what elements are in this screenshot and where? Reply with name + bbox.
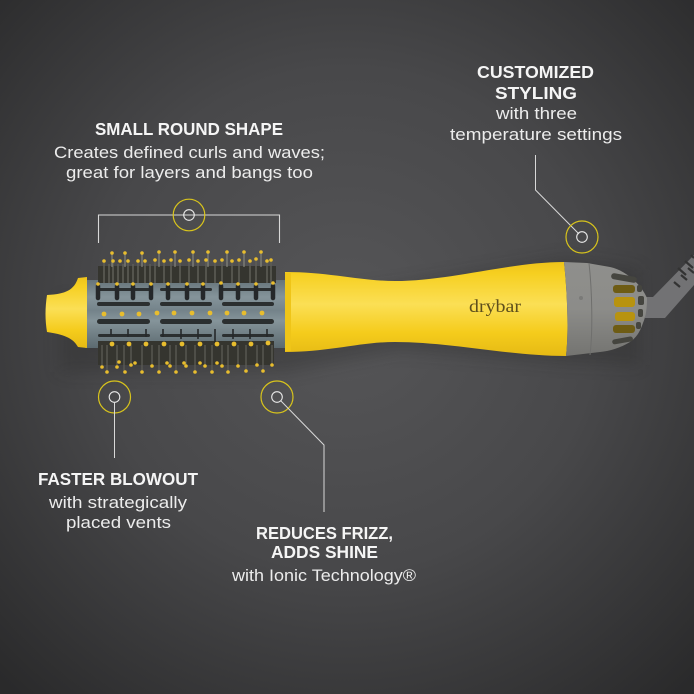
yellow bristle tips xyxy=(96,250,275,374)
bracket marker xyxy=(98,215,280,243)
brush handle xyxy=(285,262,567,356)
top bristles xyxy=(98,253,276,283)
body: small round shape xyxy=(54,143,325,182)
body: small round shape: Creates defined curls and waves; xyxy=(54,143,325,162)
heading: reduces frizz xyxy=(256,523,393,562)
heading: small round shape: SMALL ROUND SHAPE xyxy=(95,119,283,139)
marker: small round shape xyxy=(173,199,205,231)
body: reduces frizz: with Ionic Technology® xyxy=(231,566,416,585)
body: faster blowout: with strategically xyxy=(48,493,188,512)
body: faster blowout: placed vents xyxy=(66,513,171,532)
yellow barrel ring xyxy=(285,273,291,351)
marker: reduces frizz xyxy=(261,381,293,413)
barrel xyxy=(85,280,287,348)
body: customized styling xyxy=(450,104,622,144)
product: hot air brush xyxy=(46,250,694,374)
bottom bristles xyxy=(98,341,274,372)
heading: reduces frizz: ADDS SHINE xyxy=(271,542,378,562)
heading: customized styling: STYLING xyxy=(495,83,577,103)
heading: faster blowout: FASTER BLOWOUT xyxy=(38,469,198,489)
marker: faster blowout xyxy=(98,381,130,413)
body: faster blowout xyxy=(48,493,188,532)
brand logo: drybar xyxy=(469,296,521,316)
lower dark pins xyxy=(111,329,267,343)
leader line xyxy=(536,155,579,234)
black pins on barrel xyxy=(98,286,273,298)
power cord xyxy=(645,255,694,318)
body: customized styling: with three xyxy=(495,104,577,123)
body: customized styling: temperature settings xyxy=(450,125,622,144)
callout: faster blowout xyxy=(38,381,198,532)
callout: reduces frizz xyxy=(231,381,416,585)
leader line xyxy=(114,402,116,458)
heading: reduces frizz: REDUCES FRIZZ, xyxy=(256,523,393,543)
brush shadow xyxy=(60,258,640,372)
callout: customized styling xyxy=(450,62,622,253)
heading: customized styling: CUSTOMIZED xyxy=(477,62,594,82)
barrel slots xyxy=(97,288,274,337)
yellow brush tip xyxy=(46,277,87,348)
leader line xyxy=(281,401,324,512)
marker: customized styling xyxy=(566,221,598,253)
vented grey motor housing xyxy=(564,262,647,356)
callout: small round shape xyxy=(54,119,325,243)
heading: customized styling xyxy=(477,62,594,103)
body: small round shape: great for layers and bangs too xyxy=(66,163,313,182)
